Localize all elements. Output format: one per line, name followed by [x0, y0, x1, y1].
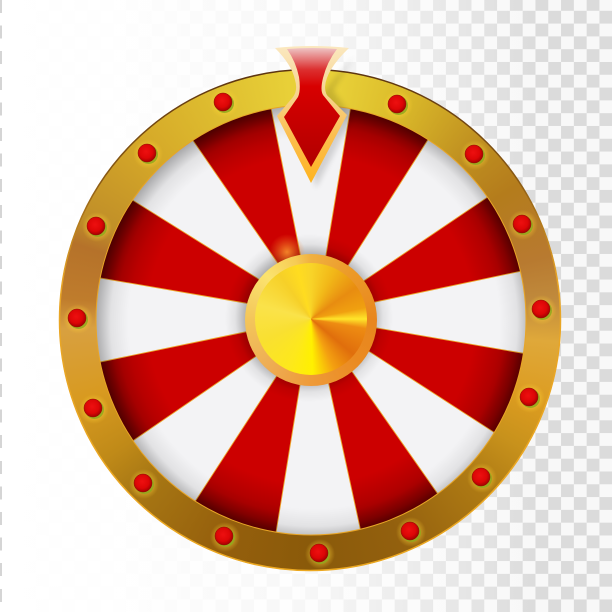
ring outer edge [60, 70, 560, 570]
hub shadow [230, 239, 388, 397]
wheel face with sectors [96, 107, 526, 534]
gold ring [59, 69, 561, 571]
bulbs around ring [63, 88, 557, 569]
hub [245, 254, 377, 386]
white base [96, 105, 526, 535]
pointer red body [284, 48, 340, 167]
left edge dashes [0, 0, 2, 612]
rim inner shadow [95, 104, 527, 536]
bulb gems [68, 93, 550, 562]
flare [270, 236, 304, 264]
bulb offset shadows [69, 94, 552, 564]
ring inner edge [96, 105, 526, 535]
pointer shadow [300, 55, 355, 188]
red sectors [100, 109, 523, 532]
hub conic centre [255, 263, 367, 375]
wheel graphic [58, 46, 562, 572]
pointer gold frame [275, 46, 349, 183]
bulb halos [63, 88, 557, 569]
pointer arrow [275, 46, 355, 188]
